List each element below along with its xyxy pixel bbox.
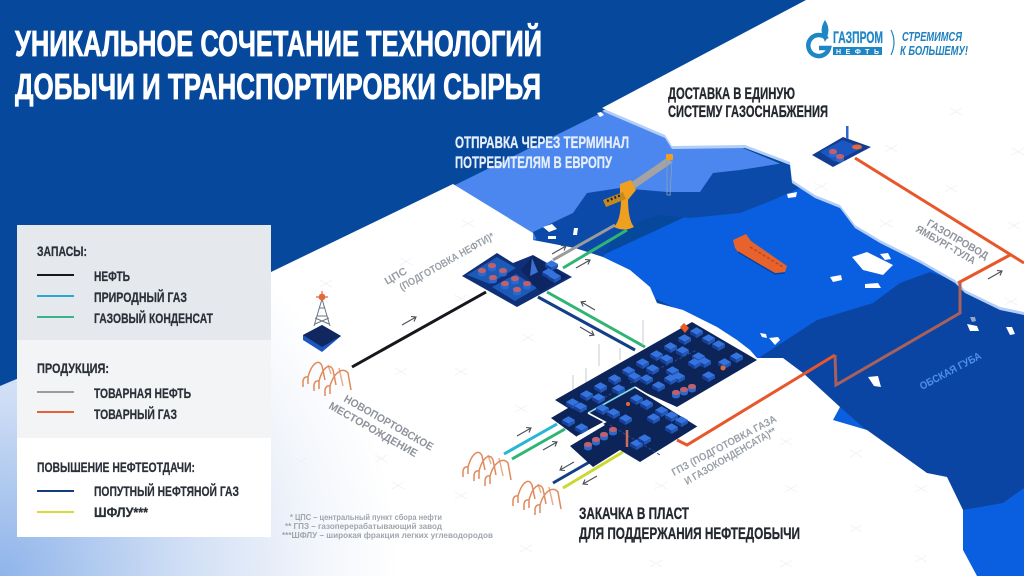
legend panel: ШФЛУ*** [94,504,148,520]
legend panel [17,225,271,537]
logo: ГАЗПРОМ [833,28,883,47]
logo [808,20,968,58]
heading: terminal: ОТПРАВКА ЧЕРЕЗ ТЕРМИНАЛ [455,133,629,152]
heading: injection: ЗАКАЧКА В ПЛАСТ [579,504,689,523]
pipelines [352,158,1024,488]
logo: НЕФТЬ [836,49,879,56]
land grid crosses [295,108,1024,567]
Ob bay deep water [760,272,1024,510]
title [15,22,542,107]
legend panel: ПРИРОДНЫЙ ГАЗ [94,288,187,305]
legend panel: ЗАПАСЫ: [37,243,87,259]
light water near terminal [453,112,800,240]
label: pipeline: ЯМБУРГ-ТУЛА [914,223,978,267]
dark water patch near terminal [533,162,800,258]
lower land [0,184,977,576]
label: CPS: (ПОДГОТОВКА НЕФТИ)* [398,230,497,294]
heading: terminal [455,133,629,172]
label: Ob bay: ОБСКАЯ ГУБА [918,350,984,393]
plant: GPZ [551,320,757,467]
label: CPS: ЦПС [382,265,410,288]
label: Novoportovskoye field: НОВОПОРТОВСКОЕ [342,393,435,453]
footnotes: ***ШФЛУ – широкая фракция легких углеводородов [282,530,493,540]
label: Novoportovskoye field: МЕСТОРОЖДЕНИЕ [327,400,419,460]
crane terminal [603,154,673,230]
heading: injection: ДЛЯ ПОДДЕРЖАНИЯ НЕФТЕДОБЫЧИ [579,524,800,543]
plant: CPS [462,253,572,307]
footnotes: * ЦПС – центральный пункт сбора нефти [290,512,442,522]
heading: gas supply [668,84,828,121]
heading: gas supply: СИСТЕМУ ГАЗОСНАБЖЕНИЯ [668,102,828,121]
label: GPZ: ГПЗ (ПОДГОТОВКА ГАЗА [670,413,779,479]
legend panel: ПОПУТНЫЙ НЕФТЯНОЙ ГАЗ [94,482,239,499]
upper land [602,0,1024,312]
legend panel: ГАЗОВЫЙ КОНДЕНСАТ [94,309,213,326]
label: pipeline: ГАЗОПРОВОД [924,217,991,262]
heading: gas supply: ДОСТАВКА В ЕДИНУЮ [668,84,795,103]
logo: К БОЛЬШЕМУ! [900,43,968,58]
legend panel: ПРОДУКЦИЯ: [37,360,109,376]
flow arrows [402,246,1002,484]
logo: СТРЕМИМСЯ [902,29,962,44]
upper land fringe [602,3,1024,315]
legend panel: ТОВАРНАЯ НЕФТЬ [94,385,191,401]
field icons: arches [303,362,561,515]
legend panel: НЕФТЬ [94,268,130,284]
footnotes [282,512,493,540]
title: УНИКАЛЬНОЕ СОЧЕТАНИЕ ТЕХНОЛОГИЙ [15,22,542,64]
gas terminal [812,126,871,167]
legend panel: ТОВАРНЫЙ ГАЗ [94,405,177,422]
heading: injection [579,504,800,543]
footnotes: ** ГПЗ – газоперерабатывающий завод [285,521,443,531]
label: CPS [382,230,497,294]
open sea [533,165,1024,576]
legend panel: ПОВЫШЕНИЕ НЕФТЕОТДАЧИ: [37,459,195,475]
label: GPZ: И ГАЗОКОНДЕНСАТА)** [682,425,779,488]
title: ДОБЫЧИ И ТРАНСПОРТИРОВКИ СЫРЬЯ [15,66,541,107]
heading: terminal: ПОТРЕБИТЕЛЯМ В ЕВРОПУ [455,153,612,172]
ice floes [543,112,1015,387]
tanker [733,234,787,274]
icon: oil well [303,291,341,352]
